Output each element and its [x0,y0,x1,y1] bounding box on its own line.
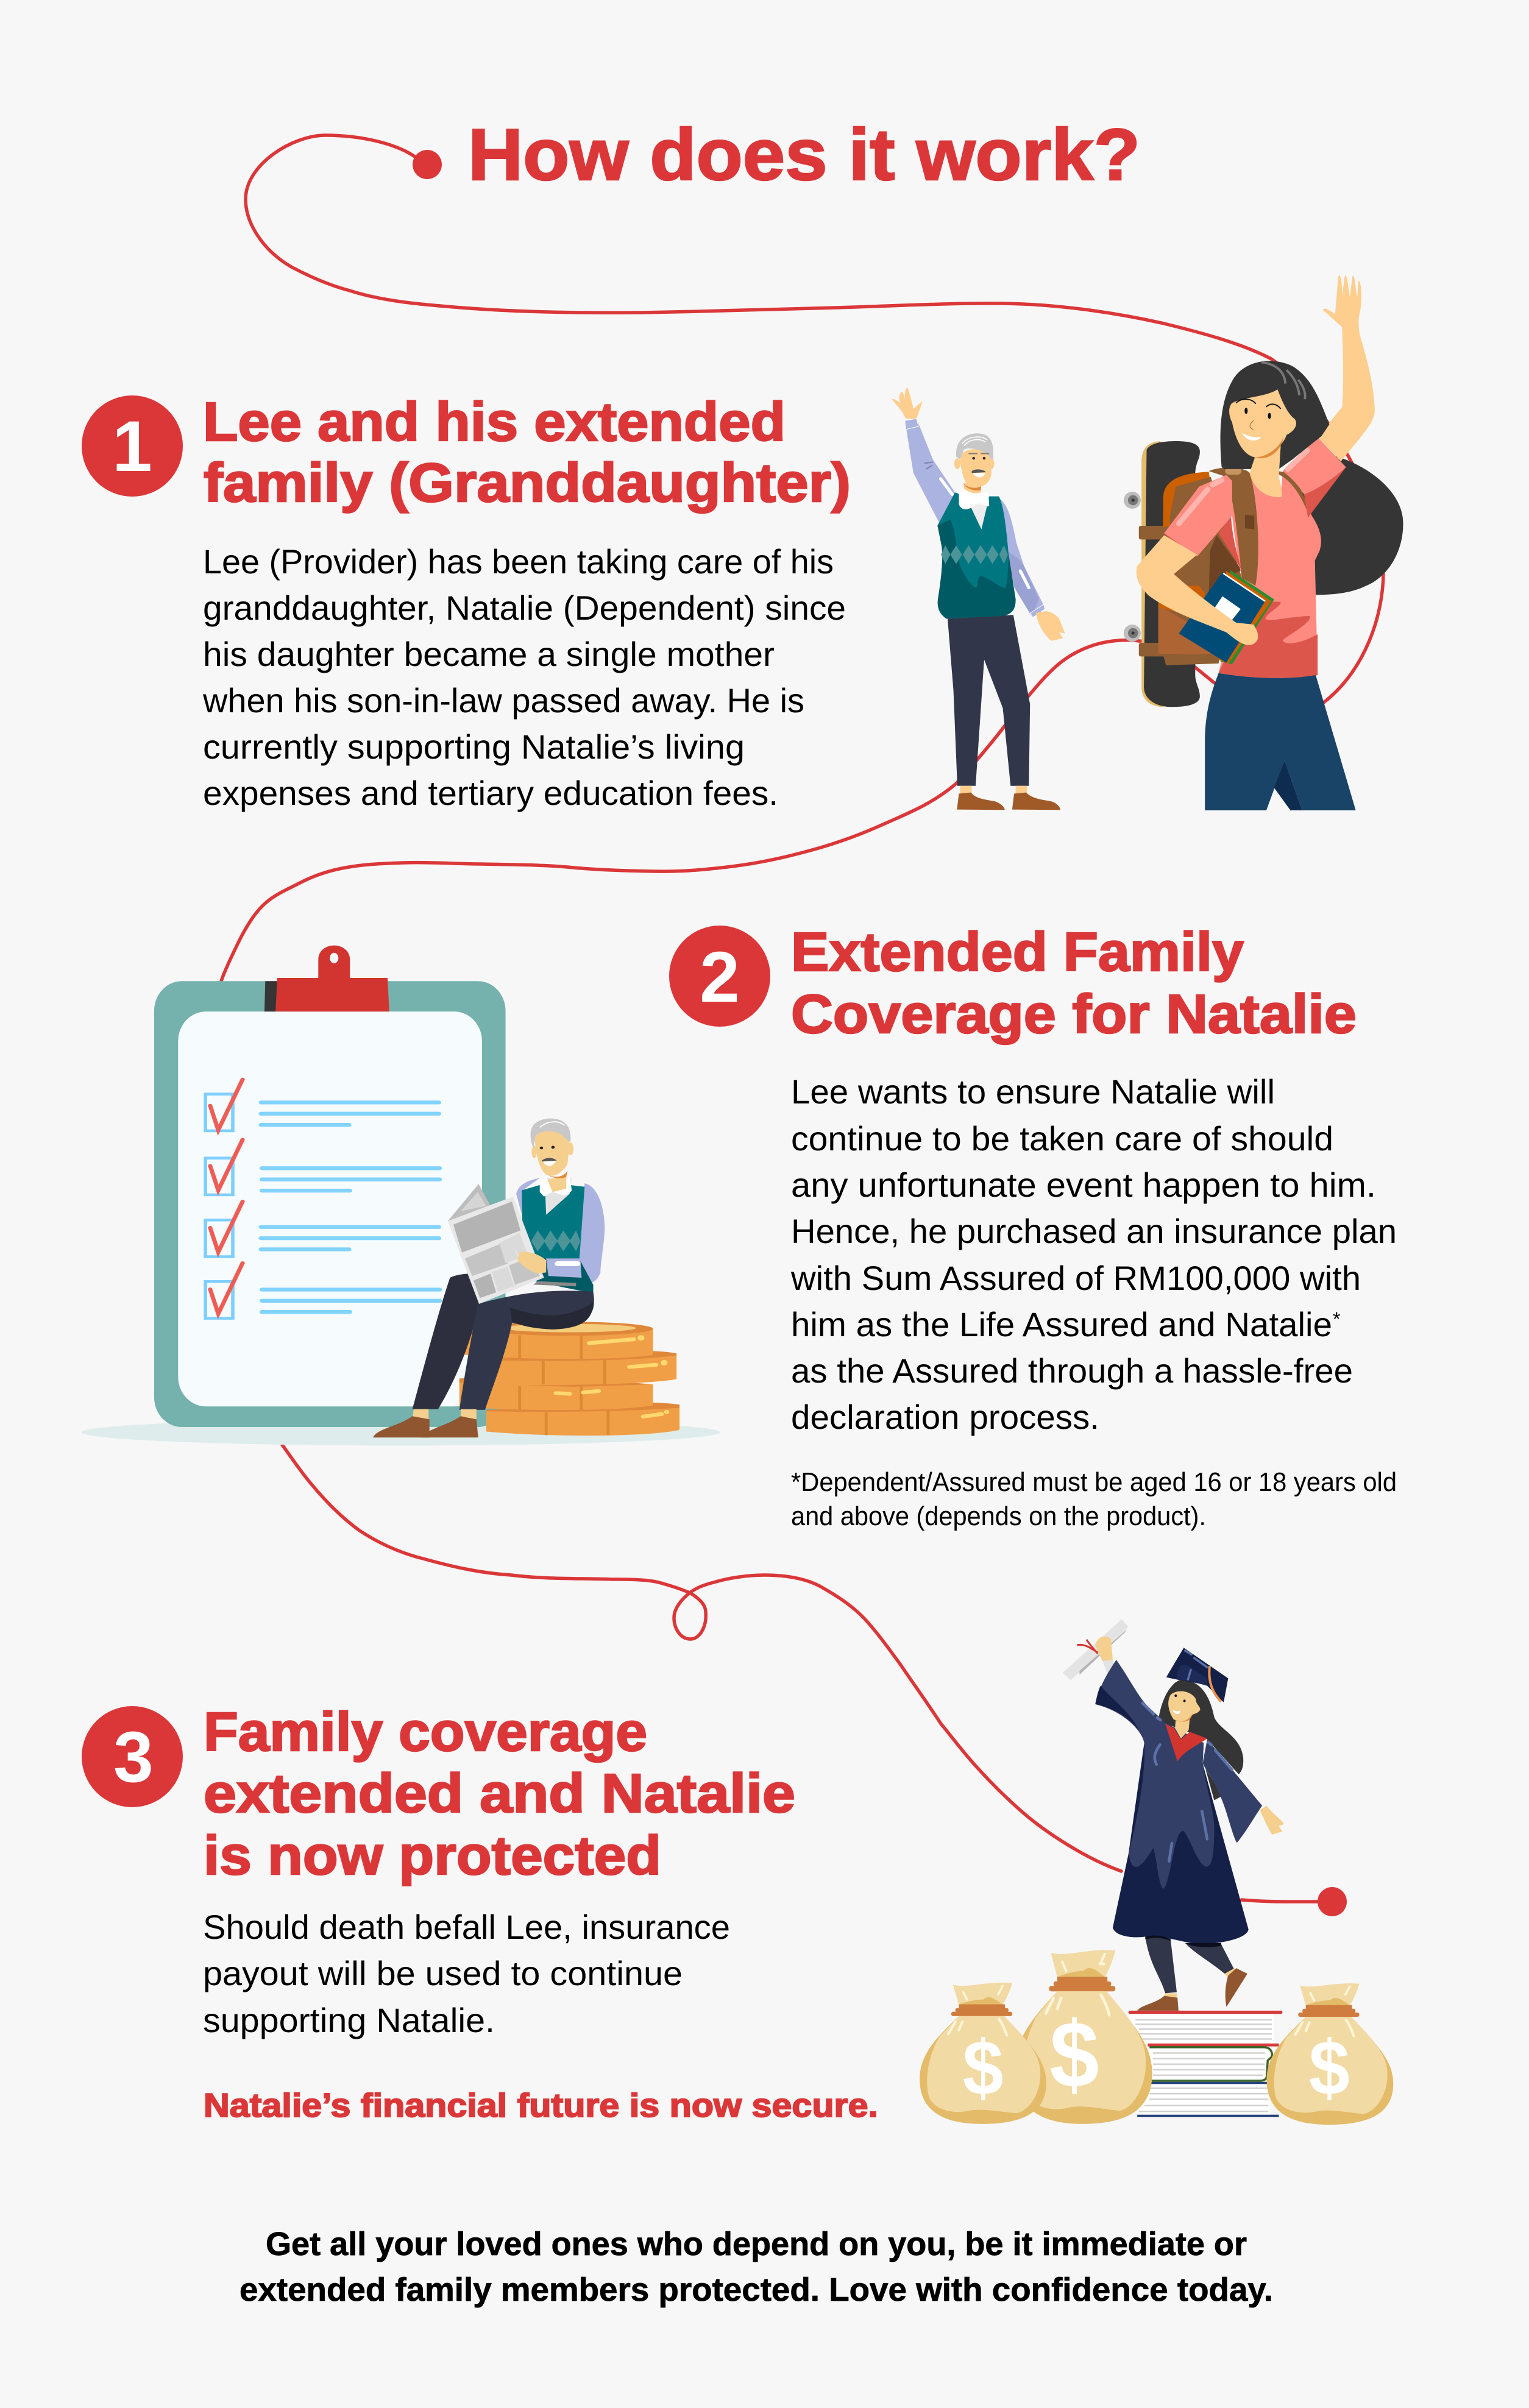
money bag: large center: $ [1049,2002,1099,2107]
heading step 1: Lee and his extended [203,392,786,453]
money bag: right: $ [1309,2025,1350,2111]
heading step 1 [203,392,851,514]
body text step 3: payout will be used to continue [203,1954,683,1992]
checklist [205,1080,440,1319]
body text step 2: declaration process. [791,1398,1099,1436]
heading step 3: Family coverage [204,1702,647,1763]
stack of coins [459,1322,679,1436]
title: How does it work? [468,114,1140,196]
body text step 3: Should death befall Lee, insurance [203,1908,730,1946]
panel: step 1 [82,392,851,812]
body text step 2: Hence, he purchased an insurance plan [791,1212,1397,1250]
body text step 1: Lee (Provider) has been taking care of his [203,542,834,581]
clipboard [154,946,506,1427]
number badge 2: 2 [700,937,740,1018]
figure: graduate [1063,1620,1284,2011]
money bag: right [1267,1983,1393,2125]
body text step 1: currently supporting Natalie’s living [203,728,745,766]
money bag: left [920,1983,1046,2124]
body text step 2: any unfortunate event happen to him. [791,1166,1376,1204]
body text step 2: Lee wants to ensure Natalie will [791,1072,1275,1111]
connecting red path with end dots [221,135,1383,1902]
start dot of path [413,150,442,179]
figure: Natalie with backpack and books [1124,275,1403,810]
heading step 3: extended and Natalie [204,1763,795,1824]
body text step 1: when his son-in-law passed away. He is [202,681,804,720]
heading step 2: Extended Family [791,922,1244,983]
highlighted statement: Natalie’s financial future is now secure. [204,2086,878,2124]
body text step 1: his daughter became a single mother [203,635,775,673]
number badge 1 [82,395,183,497]
footnote: *Dependent/Assured must be aged 16 or 18 years old [791,1467,1397,1497]
illustration: Lee and Natalie waving [892,275,1403,810]
panel: step 3 [82,1702,878,2124]
body text step 2: with Sum Assured of RM100,000 with [790,1259,1361,1297]
heading step 2: Coverage for Natalie [791,984,1357,1045]
body text step 1: granddaughter, Natalie (Dependent) since [203,589,846,627]
stack of books [1129,2011,1282,2117]
body text step 2: * [1333,1308,1340,1330]
illustration: Natalie graduating on books with money bags [920,1620,1393,2125]
number badge 2 [669,926,770,1027]
body text step 1: expenses and tertiary education fees. [203,774,778,812]
closing statement: extended family members protected. Love with confidence today. [239,2272,1273,2308]
heading step 2 [791,922,1357,1045]
heading step 1: family (Granddaughter) [204,453,851,514]
ground shadow [82,1419,720,1445]
footnote [791,1467,1397,1531]
panel: step 2 [669,922,1397,1531]
figure: Lee reading newspaper [373,1119,605,1437]
closing statement: Get all your loved ones who depend on you, be it immediate or [266,2226,1247,2262]
body text step 3 [203,1908,730,2039]
footnote: and above (depends on the product). [791,1501,1206,1531]
body text step 2: continue to be taken care of should [791,1119,1333,1158]
number badge 1: 1 [112,406,152,487]
money bag: large center [1015,1950,1152,2124]
body text step 2: as the Assured through a hassle-free [791,1351,1353,1390]
end dot of path [1318,1887,1347,1916]
heading step 3 [204,1702,795,1886]
heading step 3: is now protected [204,1825,661,1886]
body text step 2: him as the Life Assured and Natalie [791,1305,1332,1344]
body text step 1 [202,542,846,812]
money bag: left: $ [962,2025,1004,2111]
body text step 2 [790,1072,1397,1436]
illustration: clipboard checklist with Lee reading on coins [82,946,720,1445]
body text step 3: supporting Natalie. [203,2001,495,2039]
closing statement [239,2226,1273,2308]
number badge 3 [82,1706,183,1807]
figure: Lee waving [892,388,1065,810]
number badge 3: 3 [113,1717,154,1797]
